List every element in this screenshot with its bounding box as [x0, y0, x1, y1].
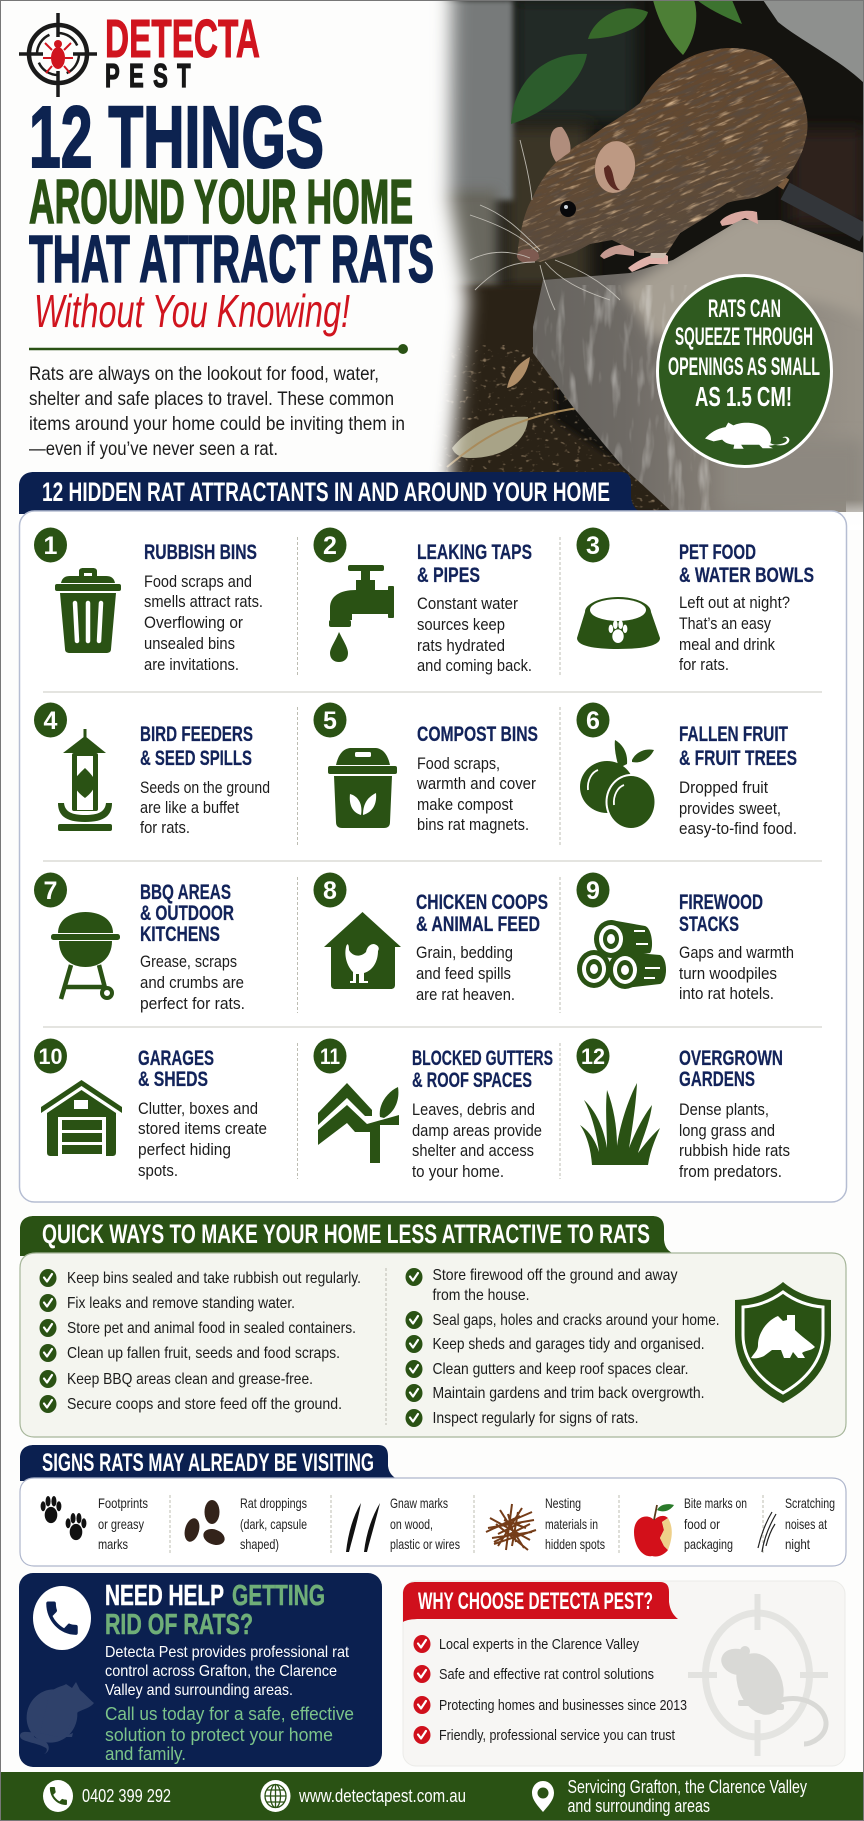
icon: chicken coop	[324, 912, 401, 989]
item 12: overgrown gardens: from predators.	[679, 1163, 782, 1181]
sign: footprints	[41, 1495, 148, 1552]
list: left tips: Store pet and animal food in sealed containers.	[67, 1320, 356, 1337]
call to action: and family.	[105, 1744, 186, 1764]
footer service area	[532, 1777, 807, 1816]
item 10: garages: spots.	[138, 1162, 178, 1180]
heading: NEED HELP	[105, 1580, 224, 1612]
photo: brown rat on a concrete edge	[416, 0, 864, 512]
sign: droppings	[182, 1495, 307, 1552]
call to action: solution to protect your home	[105, 1725, 333, 1745]
footer bar	[0, 1772, 864, 1821]
item 10: garages: 10	[38, 1044, 62, 1069]
item 6: fallen fruit	[576, 702, 797, 838]
item 1: rubbish bins: 1	[44, 532, 58, 560]
panel: quick ways	[20, 1253, 846, 1437]
item 3: pet food	[576, 528, 814, 674]
list: right tips: Inspect regularly for signs of rats.	[432, 1410, 638, 1427]
description	[105, 1644, 350, 1699]
item 3: pet food: That’s an easy	[679, 615, 772, 633]
sign: droppings: Rat droppings	[240, 1495, 307, 1511]
list: reasons: Safe and effective rat control solutions	[439, 1667, 654, 1683]
item 12: overgrown gardens: rubbish hide rats	[679, 1142, 790, 1160]
footer service area: Servicing Grafton, the Clarence Valley	[568, 1777, 807, 1797]
item 8: chicken coops: Grain, bedding	[416, 944, 513, 962]
item 9: firewood: STACKS	[679, 913, 739, 936]
item 3: pet food: PET FOOD	[679, 541, 756, 564]
banner: 12 hidden rat attractants: 12 HIDDEN RAT ATTRACTANTS IN AND AROUND YOUR HOME	[42, 477, 610, 507]
sign: gnaw marks	[346, 1495, 460, 1552]
icon: paw prints	[41, 1496, 86, 1540]
list: reasons: Friendly, professional service you can trust	[439, 1728, 675, 1744]
icon: droppings	[182, 1500, 227, 1548]
item 11: blocked gutters: to your home.	[412, 1163, 504, 1181]
icon: grass clump	[580, 1083, 660, 1165]
item 11: blocked gutters: BLOCKED GUTTERS	[412, 1047, 553, 1070]
sign: scratching noises: Scratching	[785, 1495, 835, 1511]
item 1: rubbish bins: unsealed bins	[144, 635, 235, 653]
icon: kettle BBQ	[51, 912, 120, 999]
sign: bite marks	[634, 1495, 747, 1557]
left white fade over photo	[0, 0, 468, 560]
icon: scratches	[758, 1512, 776, 1552]
list: reasons: Local experts in the Clarence Valley	[439, 1637, 640, 1653]
list: left tips: Keep bins sealed and take rubbish out regularly.	[67, 1270, 361, 1287]
item 12: overgrown gardens: 12	[581, 1044, 605, 1069]
description: Valley and surrounding areas.	[105, 1682, 293, 1699]
item 5: compost bins: warmth and cover	[416, 775, 536, 793]
item 9: firewood: 9	[586, 877, 600, 905]
icon: crosshair with bug	[19, 13, 97, 97]
sign: nesting materials: hidden spots	[545, 1536, 605, 1552]
panel: why choose	[403, 1581, 845, 1766]
icon: roof and gutter	[318, 1083, 399, 1163]
list: left tips	[40, 1269, 361, 1413]
sign: footprints: marks	[98, 1536, 128, 1552]
item 6: fallen fruit: easy-to-find food.	[679, 820, 797, 838]
item 7: BBQ areas: Grease, scraps	[140, 953, 237, 971]
callout: rats can squeeze through: RATS CAN	[708, 295, 781, 323]
footer phone	[43, 1780, 171, 1812]
item 1: rubbish bins	[34, 528, 263, 674]
sign: bite marks: packaging	[684, 1536, 733, 1552]
description: Detecta Pest provides professional rat	[105, 1644, 350, 1661]
item 2: leaking taps: 2	[323, 532, 337, 560]
item 5: compost bins	[314, 702, 538, 834]
divider with dot	[29, 344, 408, 354]
item 9: firewood: into rat hotels.	[679, 985, 774, 1003]
item 11: blocked gutters: 11	[320, 1044, 340, 1069]
list: left tips: Fix leaks and remove standing water.	[67, 1295, 295, 1312]
heading	[105, 1580, 325, 1641]
item 7: BBQ areas: 7	[44, 877, 57, 905]
icon: log stack	[577, 920, 666, 989]
item 3: pet food: & WATER BOWLS	[679, 564, 814, 587]
sign: gnaw marks: Gnaw marks	[390, 1495, 448, 1511]
list: right tips: Maintain gardens and trim back overgrowth.	[432, 1385, 704, 1402]
sign: droppings: (dark, capsule	[240, 1516, 307, 1532]
icon: nest	[486, 1504, 536, 1550]
banner: signs	[20, 1445, 397, 1481]
item 12: overgrown gardens: GARDENS	[679, 1068, 755, 1091]
title: THAT ATTRACT RATS	[29, 222, 434, 297]
item 9: firewood	[576, 872, 794, 1003]
icon: bird feeder	[58, 729, 112, 831]
item 1: rubbish bins: Food scraps and	[144, 573, 252, 591]
call to action	[105, 1704, 354, 1764]
item 2: leaking taps: Constant water	[417, 595, 518, 613]
item 1: rubbish bins: smells attract rats.	[144, 593, 263, 611]
item 7: BBQ areas: perfect for rats.	[140, 995, 245, 1013]
banner: 12 hidden rat attractants	[19, 472, 640, 514]
sign: footprints: Footprints	[98, 1495, 148, 1511]
item 4: bird feeders: for rats.	[140, 819, 190, 837]
icon: compost bin	[328, 748, 397, 828]
item 4: bird feeders: & SEED SPILLS	[140, 747, 252, 770]
item 12: overgrown gardens	[576, 1038, 790, 1181]
item 2: leaking taps: LEAKING TAPS	[417, 541, 532, 564]
item 8: chicken coops: & ANIMAL FEED	[416, 913, 540, 936]
description: control across Grafton, the Clarence	[105, 1663, 337, 1680]
footer phone: 0402 399 292	[82, 1786, 171, 1806]
list: right tips: Clean gutters and keep roof spaces clear.	[432, 1361, 688, 1378]
item 10: garages	[34, 1038, 267, 1180]
item 9: firewood: Gaps and warmth	[679, 944, 794, 962]
item 11: blocked gutters: shelter and access	[412, 1142, 534, 1160]
intro paragraph: Rats are always on the lookout for food, water,	[29, 363, 379, 385]
sign: nesting materials	[486, 1495, 605, 1552]
icon: ghost rat	[18, 1681, 94, 1754]
banner: why choose: WHY CHOOSE DETECTA PEST?	[418, 1588, 653, 1615]
banner: quick ways	[20, 1216, 674, 1256]
sign: scratching noises	[758, 1495, 835, 1552]
list: right tips: Store firewood off the ground and away	[432, 1267, 678, 1284]
icon: shield with rat	[735, 1282, 831, 1403]
item 4: bird feeders	[34, 702, 270, 837]
item 4: bird feeders: BIRD FEEDERS	[140, 723, 253, 746]
item 3: pet food: Left out at night?	[679, 594, 790, 612]
logo word: PEST: PEST	[105, 57, 200, 94]
item 4: bird feeders: 4	[44, 707, 58, 735]
footer website: www.detectapest.com.au	[298, 1786, 466, 1806]
banner: why choose	[403, 1582, 678, 1622]
item 1: rubbish bins: are invitations.	[144, 656, 239, 674]
intro paragraph: shelter and safe places to travel. These common	[29, 388, 394, 410]
heading: GETTING	[232, 1580, 325, 1612]
rat body	[470, 48, 808, 310]
intro paragraph: —even if you’ve never seen a rat.	[29, 438, 278, 460]
item 2: leaking taps: rats hydrated	[417, 637, 505, 655]
sign: bite marks: Bite marks on	[684, 1495, 747, 1511]
item 6: fallen fruit: FALLEN FRUIT	[679, 723, 788, 746]
list: reasons: Protecting homes and businesses since 2013	[439, 1698, 687, 1714]
sign: footprints: or greasy	[98, 1516, 144, 1532]
list: right tips	[406, 1267, 720, 1427]
icon: gnaw scratches	[346, 1503, 380, 1552]
item 7: BBQ areas: & OUTDOOR	[140, 902, 234, 925]
item 7: BBQ areas: KITCHENS	[140, 923, 220, 946]
item 5: compost bins: COMPOST BINS	[417, 723, 538, 746]
list: left tips: Clean up fallen fruit, seeds and food scraps.	[67, 1345, 340, 1362]
item 5: compost bins: bins rat magnets.	[417, 816, 529, 834]
icon: phone	[33, 1586, 91, 1650]
item 10: garages: & SHEDS	[138, 1068, 208, 1091]
item 7: BBQ areas	[34, 872, 245, 1013]
icon: bitten apple	[634, 1504, 674, 1557]
ground with soil and leaf litter	[420, 285, 690, 512]
icon: pet bowl	[577, 597, 660, 649]
item 11: blocked gutters: damp areas provide	[412, 1122, 542, 1140]
call to action: Call us today for a safe, effective	[105, 1704, 354, 1724]
item 12: overgrown gardens: Dense plants,	[679, 1101, 769, 1119]
icon: white rat	[705, 423, 789, 449]
metal pipe	[785, 191, 864, 233]
concrete block	[520, 210, 864, 512]
item 11: blocked gutters	[314, 1038, 553, 1181]
logo: Detecta Pest	[19, 9, 260, 97]
item 11: blocked gutters: & ROOF SPACES	[412, 1069, 532, 1092]
item 12: overgrown gardens: long grass and	[679, 1122, 775, 1140]
item 6: fallen fruit: & FRUIT TREES	[679, 747, 797, 770]
sign: nesting materials: materials in	[545, 1516, 598, 1532]
list: right tips: Seal gaps, holes and cracks around your home.	[432, 1312, 720, 1329]
title	[29, 89, 434, 297]
item 2: leaking taps: sources keep	[417, 616, 505, 634]
title: 12 THINGS	[29, 89, 324, 186]
panel: need help	[18, 1573, 382, 1767]
item 10: garages: stored items create	[138, 1120, 267, 1138]
item 8: chicken coops: are rat heaven.	[416, 986, 515, 1004]
item 6: fallen fruit: Dropped fruit	[679, 779, 768, 797]
item 5: compost bins: 5	[323, 707, 337, 735]
banner: signs: SIGNS RATS MAY ALREADY BE VISITING	[42, 1449, 374, 1477]
sign: nesting materials: Nesting	[545, 1495, 581, 1511]
icon: rubbish bin	[55, 568, 121, 653]
item 7: BBQ areas: BBQ AREAS	[140, 881, 231, 904]
item 11: blocked gutters: Leaves, debris and	[412, 1101, 535, 1119]
item 10: garages: Clutter, boxes and	[138, 1100, 258, 1118]
item 4: bird feeders: are like a buffet	[140, 799, 239, 817]
subtitle: Without You Knowing: Without You Knowing!	[34, 285, 350, 337]
icon: dripping tap	[329, 565, 394, 662]
item 3: pet food: for rats.	[679, 656, 729, 674]
list: right tips: from the house.	[432, 1287, 530, 1304]
item 4: bird feeders: Seeds on the ground	[140, 779, 270, 797]
footer service area: and surrounding areas	[568, 1796, 710, 1816]
panel: signs	[20, 1478, 846, 1566]
item 8: chicken coops: and feed spills	[416, 965, 511, 983]
item 8: chicken coops: 8	[323, 877, 337, 905]
item 2: leaking taps: & PIPES	[417, 564, 480, 587]
item 5: compost bins: Food scraps,	[417, 755, 500, 773]
item 12: overgrown gardens: OVERGROWN	[679, 1047, 783, 1070]
list: reasons	[414, 1635, 687, 1744]
item 1: rubbish bins: RUBBISH BINS	[144, 541, 257, 564]
list: left tips: Keep BBQ areas clean and grease-free.	[67, 1371, 313, 1388]
list: left tips: Secure coops and store feed off the ground.	[67, 1396, 342, 1413]
sign: scratching noises: noises at	[785, 1516, 827, 1532]
leaves	[511, 0, 742, 124]
sign: scratching noises: night	[785, 1536, 810, 1552]
heading: RID OF RATS?	[105, 1609, 253, 1641]
item 3: pet food: meal and drink	[679, 636, 776, 654]
sign: droppings: shaped)	[240, 1536, 279, 1552]
item 10: garages: GARAGES	[138, 1047, 214, 1070]
item 9: firewood: FIREWOOD	[679, 891, 763, 914]
panel: 12 attractants	[20, 511, 846, 1202]
item 6: fallen fruit: provides sweet,	[679, 800, 781, 818]
item 3: pet food: 3	[586, 532, 600, 560]
icon: ghost crosshair with rat	[688, 1594, 828, 1756]
item 7: BBQ areas: and crumbs are	[140, 974, 244, 992]
item 8: chicken coops	[314, 872, 548, 1004]
callout: rats can squeeze through: AS 1.5 CM!	[695, 381, 792, 412]
list: right tips: Keep sheds and garages tidy and organised.	[432, 1336, 704, 1353]
logo word: DETECTA: DETECTA	[105, 9, 260, 69]
sign: bite marks: food or	[684, 1516, 720, 1532]
item 1: rubbish bins: Overflowing or	[144, 614, 243, 632]
item 5: compost bins: make compost	[417, 796, 513, 814]
item 2: leaking taps	[314, 528, 532, 675]
item 10: garages: perfect hiding	[138, 1141, 231, 1159]
intro paragraph: items around your home could be inviting them in	[29, 413, 405, 435]
callout: rats can squeeze through	[658, 276, 832, 466]
item 2: leaking taps: and coming back.	[417, 657, 532, 675]
footer website	[260, 1780, 466, 1812]
title: AROUND YOUR HOME	[29, 167, 413, 237]
icon: fruit	[580, 740, 656, 830]
icon: garage	[41, 1080, 122, 1156]
sign: gnaw marks: plastic or wires	[390, 1536, 460, 1552]
item 9: firewood: turn woodpiles	[679, 965, 777, 983]
right edge fade under photo	[846, 500, 864, 530]
sign: gnaw marks: on wood,	[390, 1516, 433, 1532]
intro paragraph	[29, 363, 405, 460]
item 8: chicken coops: CHICKEN COOPS	[416, 891, 548, 914]
item 6: fallen fruit: 6	[586, 707, 600, 735]
